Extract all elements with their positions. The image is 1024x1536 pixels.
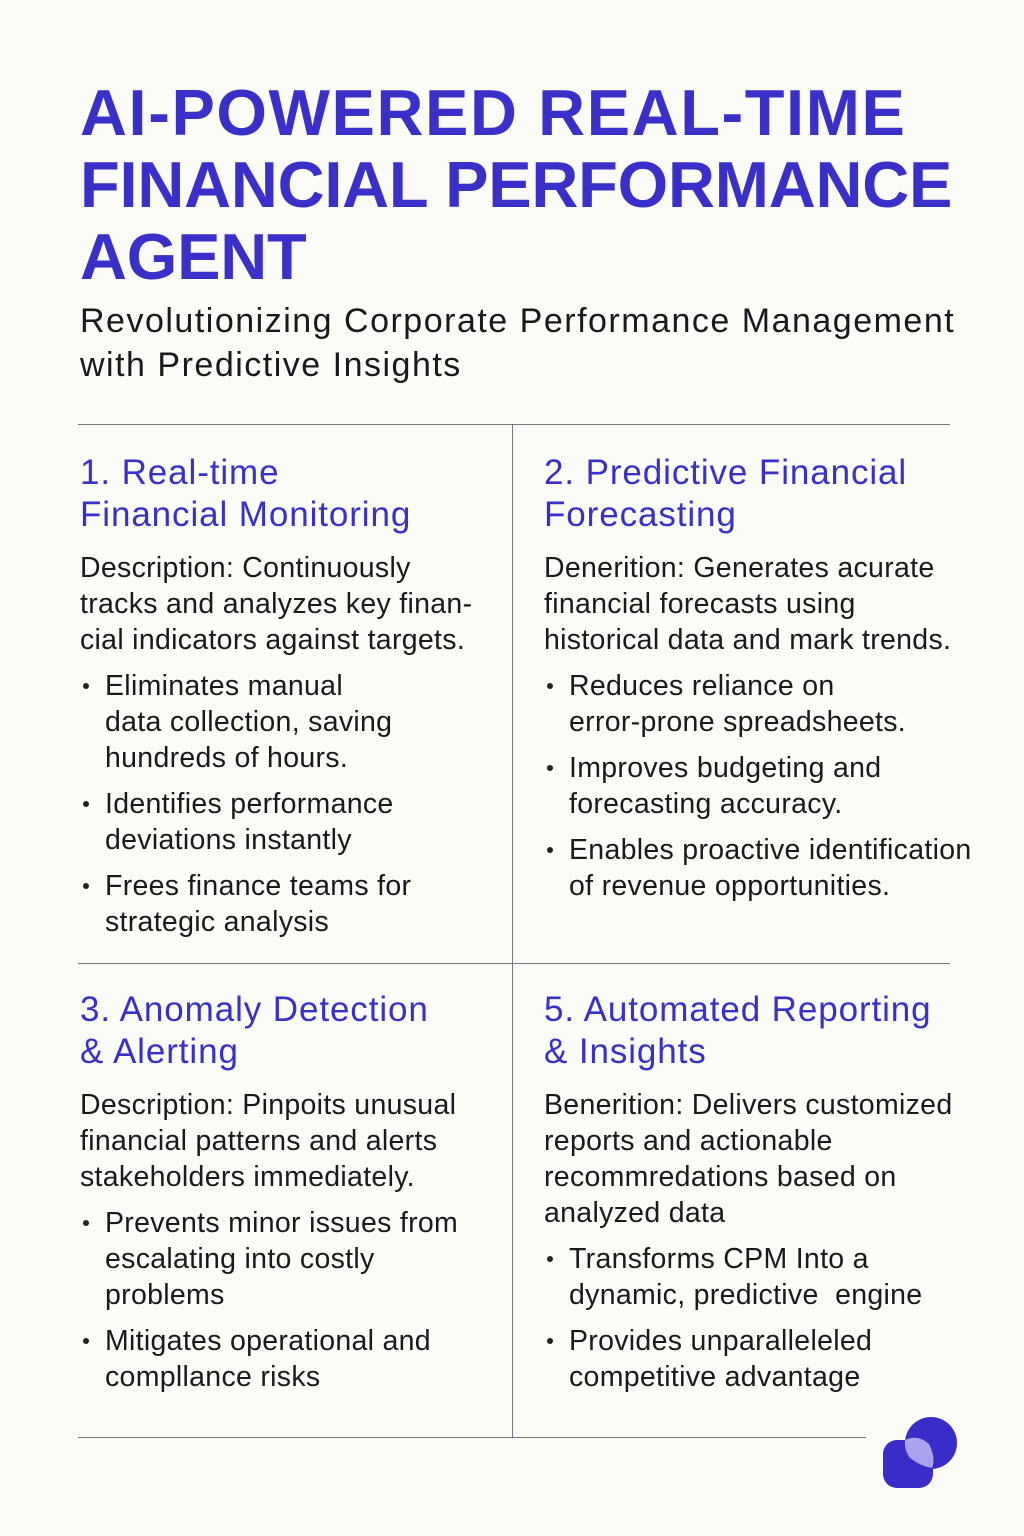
panel: anomaly detection: problems	[105, 1279, 225, 1311]
panel: real-time monitoring: hundreds of hours.	[105, 742, 348, 774]
panel: automated reporting: dynamic, predictive engine	[569, 1279, 922, 1311]
panel: anomaly detection: Mitigates operational and	[105, 1325, 431, 1357]
panel: real-time monitoring: cial indicators against targets.	[80, 624, 465, 656]
panel: real-time monitoring: data collection, saving	[105, 706, 392, 738]
panel: automated reporting: & Insights	[544, 1032, 707, 1071]
panel: real-time monitoring: strategic analysis	[105, 906, 329, 938]
panel: predictive forecasting: forecasting accuracy.	[569, 788, 842, 820]
panel: real-time monitoring: Identifies performance	[105, 788, 394, 820]
panel: predictive forecasting: Forecasting	[544, 495, 737, 534]
panel: predictive forecasting: Reduces reliance on	[569, 670, 835, 702]
panel: automated reporting: analyzed data	[544, 1197, 725, 1229]
panel: predictive forecasting: Improves budgeting and	[569, 752, 881, 784]
panel: real-time monitoring: Frees finance teams for	[105, 870, 411, 902]
panel: real-time monitoring: deviations instantly	[105, 824, 352, 856]
panel: predictive forecasting: financial forecasts using	[544, 588, 856, 620]
panel: anomaly detection: compllance risks	[105, 1361, 320, 1393]
panel: anomaly detection: Description: Pinpoits unusual	[80, 1089, 456, 1121]
panel: automated reporting: 5. Automated Reporting	[544, 990, 932, 1029]
panel: anomaly detection: Prevents minor issues from	[105, 1207, 458, 1239]
panel: anomaly detection: financial patterns and alerts	[80, 1125, 437, 1157]
subtitle	[80, 302, 955, 384]
panel: real-time monitoring: tracks and analyzes key finan-	[80, 588, 472, 620]
panel: automated reporting: Provides unparalleleled	[569, 1325, 872, 1357]
panel: predictive forecasting	[544, 453, 972, 902]
panel: anomaly detection	[80, 990, 458, 1393]
panel: anomaly detection: escalating into costly	[105, 1243, 375, 1275]
panel: predictive forecasting: Denerition: Generates acurate	[544, 552, 934, 584]
panel: predictive forecasting: error-prone spreadsheets.	[569, 706, 906, 738]
title	[80, 76, 952, 293]
panel: predictive forecasting: Enables proactive identification	[569, 834, 972, 866]
panel: real-time monitoring: Eliminates manual	[105, 670, 343, 702]
panel: anomaly detection: & Alerting	[80, 1032, 239, 1071]
panel: real-time monitoring	[80, 453, 472, 938]
panel: automated reporting: competitive advantage	[569, 1361, 860, 1393]
title: AI-POWERED REAL-TIME	[80, 76, 906, 149]
panel: predictive forecasting: historical data and mark trends.	[544, 624, 951, 656]
title: AGENT	[80, 220, 307, 293]
panel: automated reporting: recommredations based on	[544, 1161, 897, 1193]
title: FINANCIAL PERFORMANCE	[80, 148, 952, 221]
panel: anomaly detection: stakeholders immediately.	[80, 1161, 415, 1193]
panel: real-time monitoring: Financial Monitoring	[80, 495, 411, 534]
panel: automated reporting: reports and actionable	[544, 1125, 833, 1157]
panel: predictive forecasting: of revenue opportunities.	[569, 870, 890, 902]
panel: automated reporting: Benerition: Delivers customized	[544, 1089, 952, 1121]
panel: predictive forecasting: 2. Predictive Financial	[544, 453, 907, 492]
panel: automated reporting: Transforms CPM Into a	[569, 1243, 869, 1275]
panel: anomaly detection: 3. Anomaly Detection	[80, 990, 429, 1029]
panel: automated reporting	[544, 990, 952, 1393]
subtitle: with Predictive Insights	[80, 346, 462, 384]
panel: real-time monitoring: 1. Real-time	[80, 453, 279, 492]
icon: logo	[883, 1417, 957, 1488]
subtitle: Revolutionizing Corporate Performance Management	[80, 302, 955, 340]
panel: real-time monitoring: Description: Continuously	[80, 552, 411, 584]
